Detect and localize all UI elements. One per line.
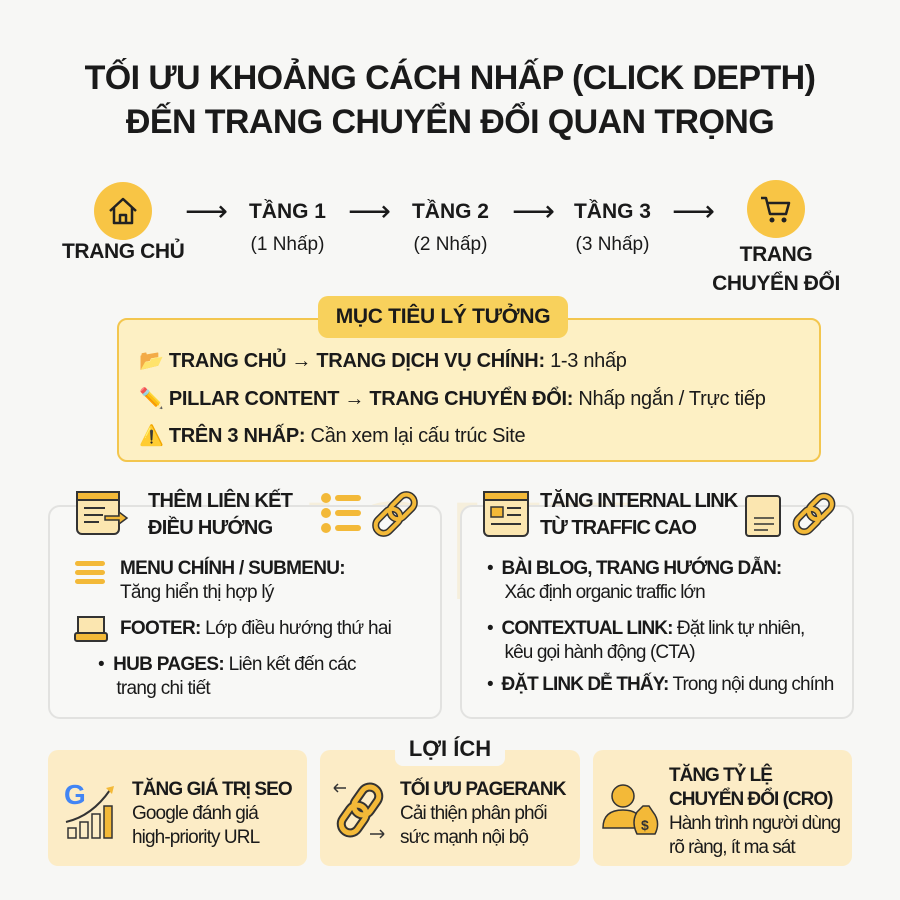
text: CHUYỂN ĐỔI (CRO) <box>669 789 832 810</box>
card: CRO <box>593 750 852 866</box>
panel: navigation links <box>48 505 442 719</box>
text <box>669 764 840 858</box>
arrow 1: ⟶ <box>185 195 228 228</box>
item: menu: Tăng hiển thị hợp lý <box>120 582 274 603</box>
label: trang chu: TRANG CHỦ <box>62 240 184 263</box>
goal row 3: ⚠️ TRÊN 3 NHẤP: Cần xem lại cấu trúc Site <box>139 425 525 447</box>
tier 2: (2 Nhấp) <box>414 234 487 255</box>
title <box>85 58 815 141</box>
item: menu: MENU CHÍNH / SUBMENU: <box>120 558 345 579</box>
tier 1: TẦNG 1 <box>249 200 326 223</box>
item: contextual <box>487 618 804 663</box>
text: TỐI ƯU PAGERANK <box>400 779 566 800</box>
heading: benefits: LỢI ÍCH <box>409 736 491 761</box>
icon: home <box>94 182 152 240</box>
icon: chain <box>334 782 384 838</box>
text <box>132 778 292 848</box>
flow diagram <box>62 180 840 295</box>
icon: article <box>483 491 529 537</box>
tier 3: (3 Nhấp) <box>576 234 649 255</box>
heading: goal label <box>318 296 568 338</box>
card: pagerank <box>320 750 580 866</box>
label: trang chuyen doi <box>712 243 840 295</box>
item: contextual: kêu gọi hành động (CTA) <box>504 642 695 663</box>
heading: navigation <box>76 488 418 539</box>
heading: goal label: MỤC TIÊU LÝ TƯỞNG <box>336 305 550 328</box>
item: blog <box>487 556 781 603</box>
text: Cải thiện phân phối <box>400 803 547 824</box>
icon: google chart: G <box>64 779 86 810</box>
icon: user money <box>602 784 658 835</box>
icon: footer <box>74 616 108 642</box>
icon: menu <box>75 561 105 584</box>
icon: user money: $ <box>641 817 649 833</box>
item: blog: Xác định organic traffic lớn <box>504 582 705 603</box>
card: SEO <box>48 750 307 866</box>
text: heading: TỪ TRAFFIC CAO <box>540 517 696 539</box>
heading: internal links <box>483 489 836 539</box>
arrow 3: ⟶ <box>512 195 555 228</box>
item: visible: • ĐẶT LINK DỄ THẤY: Trong nội dung chính <box>487 674 833 695</box>
text: rõ ràng, ít ma sát <box>669 837 795 858</box>
heading: benefits <box>395 732 505 766</box>
tier 3: TẦNG 3 <box>574 200 651 223</box>
icon: google chart <box>64 779 114 839</box>
label: trang chuyen doi: CHUYỂN ĐỔI <box>712 272 840 295</box>
icon: list + link <box>321 491 418 537</box>
title: ĐẾN TRANG CHUYỂN ĐỔI QUAN TRỌNG <box>126 103 774 141</box>
item: hub pages: • HUB PAGES: Liên kết đến các <box>98 654 356 675</box>
arrow 2: ⟶ <box>348 195 391 228</box>
text: TĂNG TỶ LỆ <box>669 765 772 786</box>
text: heading: TĂNG INTERNAL LINK <box>540 490 737 512</box>
label: trang chuyen doi: TRANG <box>740 243 812 266</box>
item: blog: • BÀI BLOG, TRANG HƯỚNG DẪN: <box>487 558 781 579</box>
text: heading: THÊM LIÊN KẾT <box>148 490 292 512</box>
panel: internal links <box>460 505 854 719</box>
goal row 2: ✏️ PILLAR CONTENT → TRANG CHUYỂN ĐỔI: Nhấp ngắn / Trực tiếp <box>139 388 766 410</box>
item: menu <box>120 556 345 603</box>
icon: cart <box>747 180 805 238</box>
item: hub pages: trang chi tiết <box>116 678 210 699</box>
item: hub pages <box>98 654 356 699</box>
tier 1: (1 Nhấp) <box>251 234 324 255</box>
text: Hành trình người dùng <box>669 813 840 834</box>
arrow 4: ⟶ <box>672 195 715 228</box>
tier 2 <box>412 199 489 255</box>
text: heading <box>148 488 293 539</box>
text: high-priority URL <box>132 827 259 848</box>
tier 1 <box>249 199 326 255</box>
icon: doc + link <box>745 492 836 537</box>
watermark: IGHT <box>300 472 634 629</box>
tier 3 <box>574 199 651 255</box>
icon: browser <box>76 491 128 535</box>
text: Google đánh giá <box>132 803 258 824</box>
item: footer: FOOTER: Lớp điều hướng thứ hai <box>120 618 391 639</box>
item: contextual: • CONTEXTUAL LINK: Đặt link tự nhiên, <box>487 618 804 639</box>
text: sức mạnh nội bộ <box>400 827 528 848</box>
tier 2: TẦNG 2 <box>412 200 489 223</box>
title: TỐI ƯU KHOẢNG CÁCH NHẤP (CLICK DEPTH) <box>85 59 815 97</box>
text: heading <box>540 489 738 539</box>
text: heading: ĐIỀU HƯỚNG <box>148 517 272 539</box>
goal row 1: 📂 TRANG CHỦ → TRANG DỊCH VỤ CHÍNH: 1-3 nhấp <box>139 350 627 372</box>
text: TĂNG GIÁ TRỊ SEO <box>132 779 292 800</box>
panel: goals <box>117 318 821 462</box>
text <box>400 778 566 848</box>
